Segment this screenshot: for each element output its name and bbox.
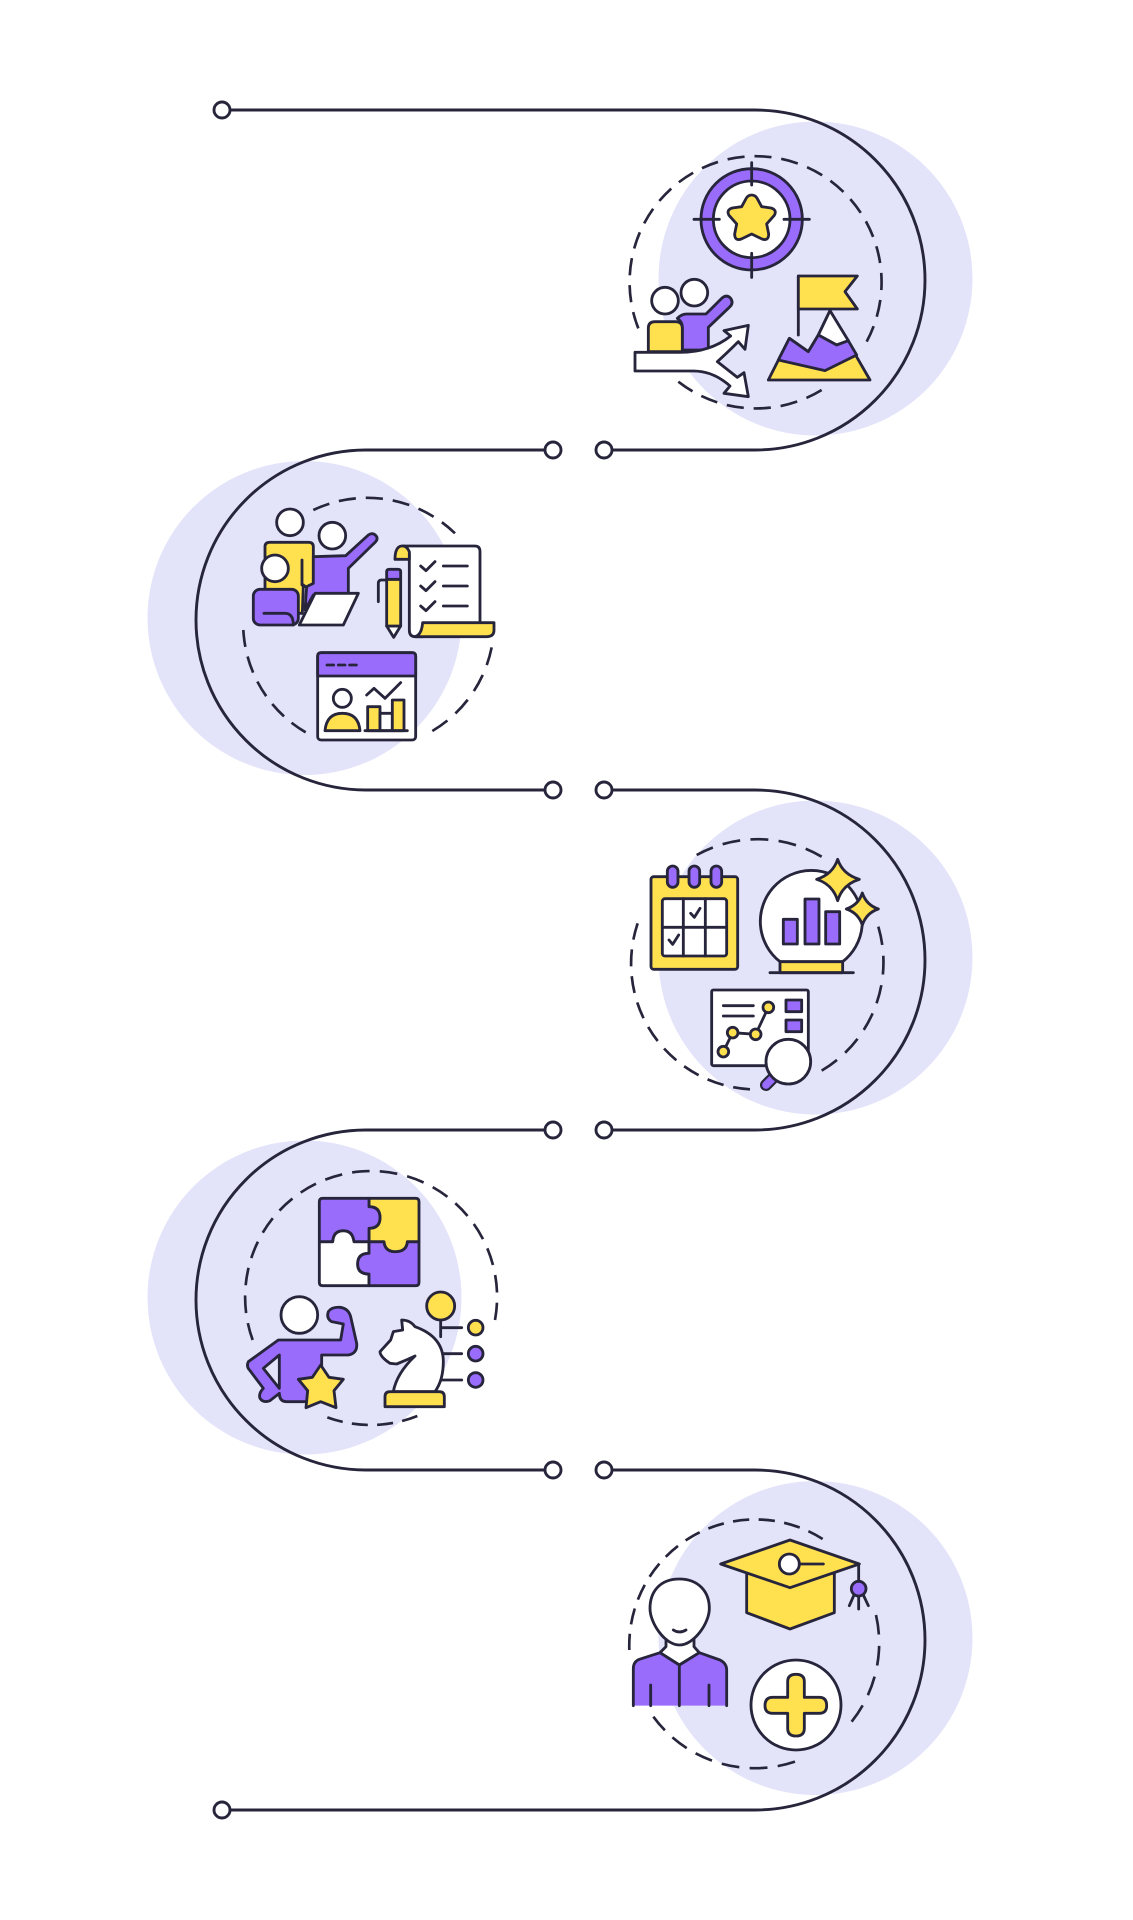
icon: puzzle bbox=[319, 1198, 419, 1286]
dashed ring 2 bbox=[243, 498, 492, 732]
icon: flexing person with star bbox=[247, 1297, 357, 1408]
icon: team with laptop bbox=[253, 509, 377, 625]
dashed ring 1 bbox=[630, 156, 882, 408]
icon: pen and checklist bbox=[378, 546, 494, 637]
dashed ring 3 bbox=[631, 839, 883, 1089]
icon: calendar bbox=[651, 866, 738, 969]
icon: person bbox=[633, 1579, 727, 1706]
icon: graduation cap bbox=[721, 1540, 868, 1629]
panel: step 2 icons bbox=[243, 498, 494, 740]
icon: chess knight with options bbox=[380, 1292, 483, 1407]
timeline path with end nodes bbox=[196, 102, 925, 1818]
dashed ring 4 bbox=[245, 1171, 497, 1425]
background circles bbox=[148, 122, 972, 1795]
panel: step 5 icons bbox=[629, 1519, 879, 1768]
icon: analytics window bbox=[318, 653, 416, 740]
panel: step 4 icons bbox=[245, 1171, 497, 1425]
icon: flag on mountain bbox=[768, 276, 870, 380]
icon: target with star bbox=[694, 163, 809, 277]
icon: crystal ball with chart bbox=[760, 859, 878, 973]
icon: plus in circle bbox=[751, 1660, 841, 1750]
icon: team choosing direction bbox=[635, 279, 748, 397]
panel: step 3 icons bbox=[631, 839, 883, 1089]
icon: report with magnifier bbox=[712, 990, 811, 1085]
dashed ring 5 bbox=[629, 1519, 879, 1768]
panel: step 1 icons bbox=[630, 156, 882, 408]
